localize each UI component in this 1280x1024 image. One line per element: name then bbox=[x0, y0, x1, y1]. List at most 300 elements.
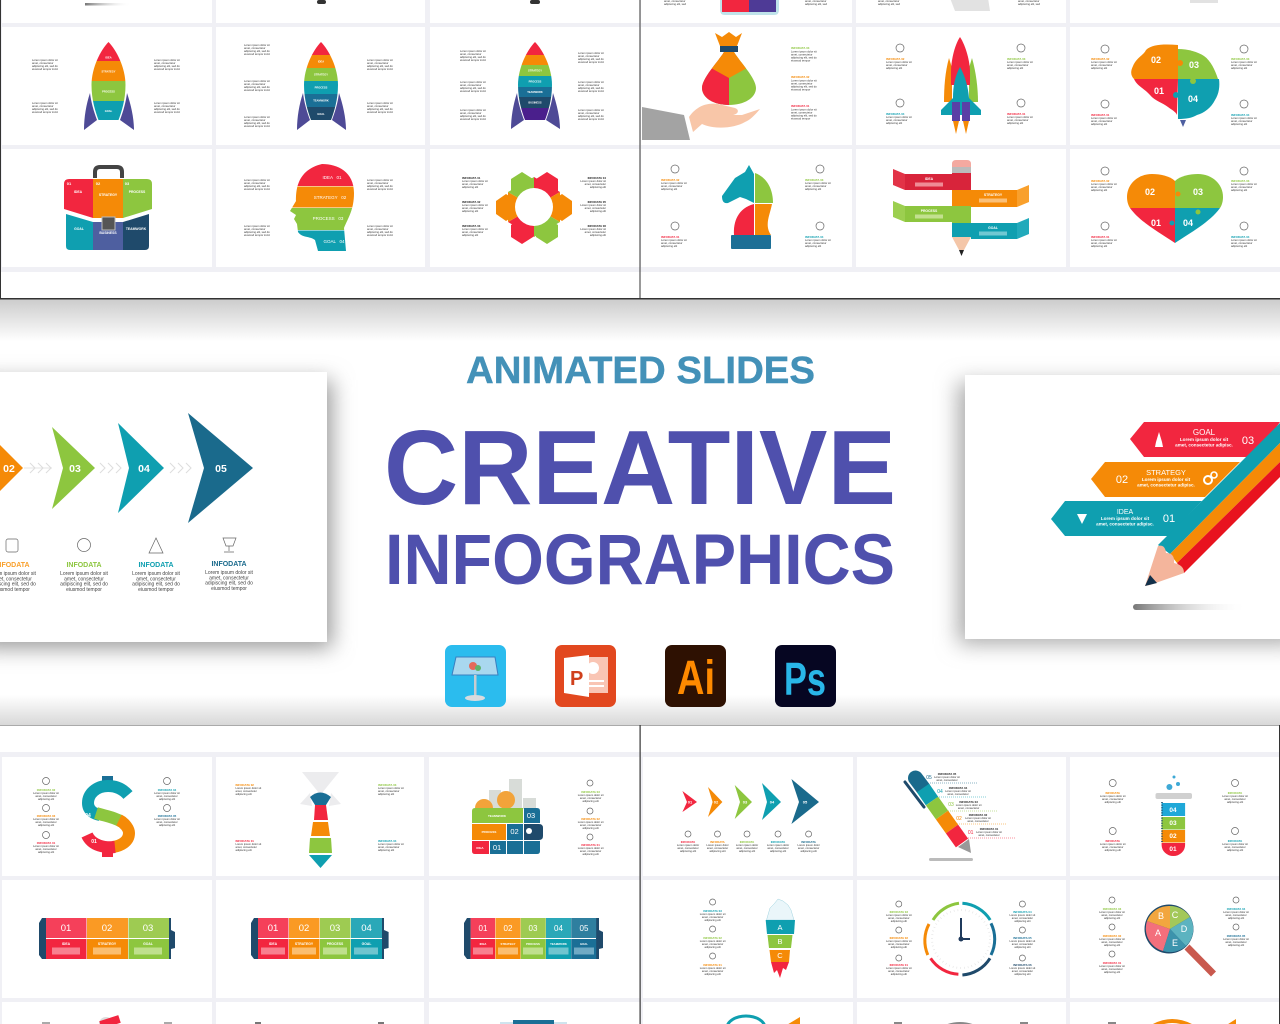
panel: left preview slide with arrows: eiusmod tempor bbox=[66, 587, 102, 593]
slide: chess knight: amet, consectetur bbox=[661, 241, 682, 245]
slide: heart puzzle: amet, consectetur bbox=[1231, 241, 1252, 245]
panel: top-right slide sheet: adipiscing elit, sed bbox=[664, 2, 686, 6]
slide: battery with five cells: 05 bbox=[580, 924, 589, 933]
slide: diagonal pen: amet, consectetur bbox=[947, 792, 969, 796]
slide: test tube: INFODATA bbox=[1105, 839, 1121, 843]
slide: wallet with coins bbox=[472, 779, 604, 856]
slide: rocket with four sections: IDEA bbox=[105, 56, 112, 60]
slide: magnifier pie: adipiscing elit bbox=[1104, 943, 1120, 947]
slide: rocket with seven sections: eiusmod tempor incid. bbox=[578, 60, 605, 64]
slide: necktie: INFODATA 04 bbox=[378, 839, 397, 843]
slide: iceberg: Lorem ipsum dolor sit bbox=[700, 939, 726, 943]
slide: briefcase bbox=[64, 167, 152, 250]
slide: head profile: adipiscing elit, sed do bbox=[244, 230, 270, 234]
slide: five arrows bbox=[677, 779, 820, 853]
slide: iceberg: INFODATA 02 bbox=[703, 936, 722, 940]
slide: money bag on hand: amet, consectetur bbox=[791, 81, 812, 85]
slide: wallet with coins: INFODATA 01 bbox=[581, 843, 600, 847]
slide: test tube: Lorem ipsum dolor sit bbox=[1100, 794, 1126, 798]
slide: five arrows: 02 bbox=[714, 800, 719, 804]
slide: brain puzzle: amet, consectetur bbox=[1091, 63, 1112, 67]
panel: right preview slide with pencil: 02 bbox=[1116, 474, 1128, 486]
slide: clock: INFODATA 05 bbox=[1013, 936, 1032, 940]
slide: battery with five cells: 03 bbox=[529, 924, 538, 933]
slide: battery with four cells: IDEA bbox=[269, 942, 278, 946]
slide: test tube: INFODATA bbox=[1228, 839, 1243, 843]
slide: rocket with six sections: adipiscing elit, sed do bbox=[244, 121, 270, 125]
slide: head profile: adipiscing elit, sed do bbox=[367, 184, 393, 188]
slide: dollar sign bbox=[33, 776, 180, 857]
slide: head profile: eiusmod tempor incid. bbox=[244, 187, 271, 191]
slide: rocket with six sections bbox=[244, 40, 394, 130]
slide: gear ring: Lorem ipsum dolor sit bbox=[462, 179, 488, 183]
slide: battery with five cells: TEAMWORK bbox=[550, 942, 567, 946]
slide: rocket with seven sections: Lorem ipsum dolor sit bbox=[460, 108, 486, 112]
slide: battery with five cells: GOAL bbox=[580, 942, 588, 946]
slide: battery with four cells: 02 bbox=[299, 923, 309, 934]
slide: brain puzzle: adipiscing elit bbox=[1231, 66, 1247, 70]
slide: money bag on hand: Lorem ipsum dolor sit bbox=[791, 49, 817, 53]
slide: necktie: Lorem ipsum dolor sit bbox=[378, 842, 404, 846]
slide: battery with four cells bbox=[251, 918, 389, 959]
panel: left preview slide with arrows: 02 bbox=[3, 463, 15, 475]
slide: heart puzzle: INFODATA 03 bbox=[1231, 179, 1250, 183]
panel: right preview slide with pencil: 03 bbox=[1242, 435, 1254, 447]
slide: big rocket: amet, consectetur bbox=[886, 63, 907, 67]
slide: rocket with four sections: adipiscing elit, sed do bbox=[32, 64, 58, 68]
slide: big rocket: Lorem ipsum dolor sit bbox=[886, 60, 912, 64]
slide: rocket with seven sections: PROCESS bbox=[529, 80, 542, 84]
slide: diagonal pen: INFODATA 01 bbox=[980, 827, 999, 831]
slide: five arrows: Lorem ipsum dolor bbox=[736, 843, 758, 847]
slide: clock: adipiscing elit bbox=[1014, 919, 1031, 923]
slide: test tube: Lorem ipsum dolor sit bbox=[1100, 842, 1126, 846]
slide: five arrows: adipiscing elit bbox=[770, 849, 786, 853]
slide: rocket with four sections: GOAL bbox=[105, 109, 113, 113]
slide: brain puzzle: 02 bbox=[1151, 55, 1161, 65]
slide: iceberg: Lorem ipsum dolor sit bbox=[700, 966, 726, 970]
slide: magnifier pie: INFODATA 05 bbox=[1227, 934, 1246, 938]
slide: rocket with seven sections: adipiscing elit, sed do bbox=[460, 114, 486, 118]
slide: brain puzzle: INFODATA 03 bbox=[1231, 57, 1250, 61]
panel: top-right slide sheet: amet, consectetur bbox=[1018, 0, 1039, 3]
slide: brain puzzle bbox=[1091, 45, 1257, 127]
slide: test tube: adipiscing elit bbox=[1105, 800, 1121, 804]
slide: rocket with seven sections: Lorem ipsum dolor sit bbox=[578, 108, 604, 112]
slide: wallet with coins: adipiscing elit bbox=[583, 826, 599, 830]
panel: left preview slide with arrows: 03 bbox=[69, 463, 81, 475]
panel: bottom-left slide sheet bbox=[0, 725, 640, 1024]
slide: gear ring: adipiscing elit bbox=[462, 209, 478, 213]
slide: five arrows: Lorem ipsum dolor bbox=[767, 843, 789, 847]
panel: left preview slide with arrows: eiusmod tempor bbox=[211, 586, 247, 592]
slide: five arrows: INFODATA bbox=[710, 840, 726, 844]
slide: rocket with seven sections: TEAMWORK bbox=[527, 90, 543, 94]
slide: five arrows: amet, consectetur bbox=[677, 846, 699, 850]
slide: magnifier pie: A bbox=[1155, 928, 1161, 938]
slide: rocket with four sections: eiusmod tempor incid. bbox=[154, 67, 181, 71]
slide: big rocket: amet, consectetur bbox=[1007, 118, 1028, 122]
slide: rocket with six sections: adipiscing elit, sed do bbox=[244, 85, 270, 89]
slide: gear ring: amet, consectetur bbox=[462, 230, 483, 234]
slide: diagonal pen: amet, consectetur bbox=[936, 778, 958, 782]
slide: gear ring: INFODATA 01 bbox=[462, 176, 481, 180]
slide: iceberg: adipiscing elit bbox=[705, 945, 721, 949]
panel: left preview slide with arrows: amet, consectetur bbox=[209, 575, 249, 581]
slide: test tube: amet, consectetur bbox=[1224, 845, 1246, 849]
slide: brain puzzle: amet, consectetur bbox=[1231, 63, 1252, 67]
slide: briefcase: 03 bbox=[125, 181, 130, 186]
slide: battery with three cells: 01 bbox=[61, 923, 71, 934]
slide: clock: adipiscing elit bbox=[891, 945, 907, 949]
slide: dollar sign: Lorem ipsum dolor sit bbox=[33, 791, 59, 795]
slide: battery with five cells: 02 bbox=[504, 924, 513, 933]
slide: rocket with seven sections: eiusmod tempor incid. bbox=[460, 117, 487, 121]
icon: illustrator bbox=[665, 645, 726, 707]
slide: gear ring: amet, consectetur bbox=[585, 206, 606, 210]
slide: test tube: amet, consectetur bbox=[1102, 797, 1123, 801]
slide: wallet with coins: Lorem ipsum dolor sit bbox=[578, 820, 604, 824]
slide: dollar sign: Lorem ipsum dolor sit bbox=[154, 817, 180, 821]
slide: wallet with coins: amet, consectetur bbox=[580, 849, 601, 853]
slide: heart puzzle: adipiscing elit bbox=[1231, 188, 1247, 192]
slide: gear ring: adipiscing elit bbox=[590, 233, 606, 237]
panel: central hero background bbox=[0, 0, 1280, 725]
slide: rocket with six sections: STRATEGY bbox=[314, 72, 328, 76]
slide: iceberg: C bbox=[777, 951, 783, 960]
slide: dollar sign: amet, consectetur bbox=[35, 794, 57, 798]
slide: rocket with four sections: eiusmod tempor incid. bbox=[154, 110, 181, 114]
slide: test tube bbox=[1100, 776, 1248, 856]
slide: dollar sign: Lorem ipsum dolor sit bbox=[33, 817, 59, 821]
slide: rocket with four sections: PROCESS bbox=[102, 90, 115, 94]
slide: diagonal pen: amet, consectetur bbox=[978, 833, 1000, 837]
slide: rocket with six sections: Lorem ipsum dolor sit bbox=[367, 58, 393, 62]
slide: brain puzzle: Lorem ipsum dolor sit bbox=[1231, 60, 1257, 64]
slide: gear ring: Lorem ipsum dolor sit bbox=[462, 203, 488, 207]
slide: dollar sign: amet, consectetur bbox=[35, 847, 57, 851]
icon: powerpoint bbox=[555, 645, 616, 707]
slide: rocket with four sections: amet, consectetur bbox=[154, 61, 175, 65]
slide: rocket with six sections: adipiscing elit, sed do bbox=[367, 107, 393, 111]
slide: diagonal pen: 02 bbox=[956, 816, 962, 822]
slide: briefcase: 02 bbox=[96, 181, 101, 186]
slide: magnifier pie bbox=[1099, 897, 1249, 974]
slide: heart puzzle: Lorem ipsum dolor sit bbox=[1091, 182, 1117, 186]
slide: diagonal pen: INFODATA 05 bbox=[938, 772, 957, 776]
slide: big rocket: INFODATA 03 bbox=[1007, 57, 1026, 61]
slide: iceberg: A bbox=[777, 923, 783, 932]
slide: rocket with six sections: eiusmod tempor incid. bbox=[244, 124, 271, 128]
slide: rocket with four sections: Lorem ipsum dolor sit bbox=[32, 101, 58, 105]
slide: dollar sign: 04 bbox=[85, 813, 91, 819]
slide: dollar sign: Lorem ipsum dolor sit bbox=[154, 791, 180, 795]
slide: money bag on hand bbox=[642, 32, 817, 140]
slide: five arrows: INFODATA bbox=[801, 840, 817, 844]
icon: photoshop bbox=[775, 645, 836, 707]
slide: head profile: amet, consectetur bbox=[244, 181, 265, 185]
slide: five arrows: Lorem ipsum dolor bbox=[797, 843, 820, 847]
slide: dollar sign: adipiscing elit bbox=[38, 823, 54, 827]
slide: rocket with six sections: IDEA bbox=[318, 60, 324, 64]
slide: necktie: INFODATA 03 bbox=[378, 783, 397, 787]
slide: brain puzzle: INFODATA 02 bbox=[1091, 57, 1110, 61]
panel: left preview slide with arrows: adipiscing elit, sed do bbox=[132, 582, 180, 588]
slide: five arrows: INFODATA bbox=[681, 840, 696, 844]
slide: head profile: adipiscing elit, sed do bbox=[244, 184, 270, 188]
slide: clock: adipiscing elit bbox=[891, 972, 907, 976]
slide: briefcase: PROCESS bbox=[129, 190, 146, 194]
slide: magnifier pie: amet, consectetur bbox=[1225, 913, 1247, 917]
slide: wallet with coins: IDEA bbox=[476, 846, 484, 850]
slide: chess knight: amet, consectetur bbox=[805, 241, 826, 245]
slide: brain puzzle: adipiscing elit bbox=[1091, 122, 1107, 126]
slide: test tube: 03 bbox=[1169, 820, 1177, 827]
slide: gear ring bbox=[462, 172, 606, 244]
slide: rocket with six sections: TEAMWORK bbox=[313, 98, 329, 102]
slide: rocket with seven sections: adipiscing elit, sed do bbox=[460, 55, 486, 59]
slide: magnifier pie: Lorem ipsum dolor sit bbox=[1099, 910, 1125, 914]
slide: chess knight: Lorem ipsum dolor sit bbox=[805, 181, 831, 185]
slide: clock: Lorem ipsum dolor sit bbox=[1010, 939, 1035, 943]
slide: big rocket: Lorem ipsum dolor sit bbox=[1007, 115, 1033, 119]
slide: dollar sign: 03 bbox=[107, 834, 113, 840]
slide: iceberg: amet, consectetur bbox=[702, 942, 723, 946]
slide: partial bottom row right bbox=[727, 1016, 1236, 1024]
slide: money bag on hand: eiusmod tempor bbox=[791, 116, 810, 120]
slide: head profile bbox=[244, 160, 394, 252]
slide: big rocket: adipiscing elit bbox=[1007, 121, 1023, 125]
slide: head profile: adipiscing elit, sed do bbox=[367, 230, 393, 234]
slide: rocket with seven sections: amet, consectetur bbox=[460, 83, 481, 87]
slide: dollar sign: 01 bbox=[115, 803, 121, 809]
panel: right preview slide with pencil: Lorem ipsum dolor sit bbox=[1101, 516, 1150, 521]
slide: rocket with six sections: GOAL bbox=[317, 112, 325, 116]
slide: chess knight: INFODATA 03 bbox=[805, 178, 824, 182]
slide: clock: amet, consectetur bbox=[1012, 969, 1033, 973]
slide: magnifier pie: adipiscing elit bbox=[1104, 970, 1120, 974]
slide: money bag on hand: adipiscing elit, sed do bbox=[791, 55, 817, 59]
slide: wallet with coins: TEAMWORK bbox=[488, 814, 507, 818]
slide: heart puzzle: amet, consectetur bbox=[1231, 185, 1252, 189]
slide: gear ring: Lorem ipsum dolor sit bbox=[462, 227, 488, 231]
slide: gear ring: amet, consectetur bbox=[462, 206, 483, 210]
slide: chess knight: INFODATA 01 bbox=[661, 235, 680, 239]
slide: test tube: 04 bbox=[1169, 807, 1177, 814]
slide: rocket with seven sections: Lorem ipsum dolor sit bbox=[460, 49, 486, 53]
slide: money bag on hand: eiusmod tempor bbox=[791, 87, 810, 91]
slide: chess knight: Lorem ipsum dolor sit bbox=[661, 238, 687, 242]
slide: magnifier pie: amet, consectetur bbox=[1101, 940, 1123, 944]
slide: dollar sign: adipiscing elit bbox=[38, 850, 54, 854]
slide: magnifier pie: C bbox=[1172, 910, 1179, 920]
panel: left preview slide with arrows: INFODATA bbox=[66, 562, 102, 569]
slide: heart puzzle: 04 bbox=[1183, 218, 1193, 228]
slide: iceberg: Lorem ipsum dolor sit bbox=[700, 912, 726, 916]
slide: brain puzzle: Lorem ipsum dolor sit bbox=[1231, 116, 1257, 120]
slide: gear ring: adipiscing elit bbox=[590, 185, 606, 189]
slide: iceberg: INFODATA 01 bbox=[703, 963, 722, 967]
slide: rocket with seven sections: amet, consectetur bbox=[460, 111, 481, 115]
slide: rocket with six sections: amet, consectetur bbox=[244, 82, 265, 86]
slide: diagonal pen: 05 bbox=[926, 775, 932, 781]
slide: dollar sign: adipiscing elit bbox=[159, 823, 175, 827]
slide: rocket with four sections: amet, consectetur bbox=[32, 61, 53, 65]
slide: rocket with seven sections: Lorem ipsum dolor sit bbox=[578, 51, 604, 55]
slide: wallet with coins: Lorem ipsum dolor sit bbox=[578, 846, 604, 850]
slide: pencil with ribbons: PROCESS bbox=[921, 209, 938, 213]
slide: diagonal pen: amet, consectetur bbox=[967, 819, 989, 823]
slide: test tube: amet, consectetur bbox=[1102, 845, 1123, 849]
slide: rocket with four sections: Lorem ipsum dolor sit bbox=[154, 58, 180, 62]
slide: head profile: eiusmod tempor incid. bbox=[367, 187, 394, 191]
slide: battery with three cells: IDEA bbox=[62, 942, 71, 946]
slide: money bag on hand: adipiscing elit, sed do bbox=[791, 84, 817, 88]
panel: right preview slide with pencil: amet, consectetur adipisc. bbox=[1096, 521, 1154, 526]
slide: gear ring: Lorem ipsum dolor sit bbox=[580, 203, 606, 207]
slide: heart puzzle: INFODATA 02 bbox=[1091, 179, 1110, 183]
icon: powerpoint: P bbox=[570, 668, 583, 690]
slide: briefcase: STRATEGY bbox=[99, 193, 118, 197]
slide: partial bottom row left bbox=[42, 1015, 567, 1024]
slide: clock: Lorem ipsum dolor sit bbox=[1010, 966, 1035, 970]
slide: pencil with ribbons: IDEA bbox=[925, 177, 934, 181]
slide: big rocket: INFODATA 04 bbox=[886, 112, 905, 116]
slide: diagonal pen: 04 bbox=[937, 789, 943, 795]
slide: dollar sign: amet, consectetur bbox=[156, 794, 178, 798]
slide: dollar sign: INFODATA 01 bbox=[37, 841, 56, 845]
slide: necktie: Lorem ipsum dolor sit bbox=[236, 842, 261, 846]
slide: heart puzzle: adipiscing elit bbox=[1091, 188, 1107, 192]
slide: rocket with seven sections: eiusmod tempor incid. bbox=[578, 89, 605, 93]
slide: test tube: Lorem ipsum dolor sit bbox=[1222, 794, 1248, 798]
slide: magnifier pie: Lorem ipsum dolor sit bbox=[1099, 937, 1125, 941]
panel: right preview slide with pencil: GOAL bbox=[1193, 428, 1216, 437]
slide: rocket with six sections: Lorem ipsum dolor sit bbox=[244, 115, 270, 119]
slide: necktie: adipiscing elit bbox=[378, 792, 394, 796]
slide: head profile: amet, consectetur bbox=[244, 227, 265, 231]
slide: rocket with seven sections: Lorem ipsum dolor sit bbox=[578, 80, 604, 84]
panel: left preview slide with arrows: eiusmod tempor bbox=[138, 587, 174, 593]
slide: wallet with coins: INFODATA 02 bbox=[581, 817, 600, 821]
slide: wallet with coins: amet, consectetur bbox=[580, 796, 601, 800]
slide: brain puzzle: 04 bbox=[1188, 94, 1198, 104]
slide: magnifier pie: B bbox=[1158, 911, 1164, 921]
slide: heart puzzle: amet, consectetur bbox=[1091, 241, 1112, 245]
slide: iceberg: B bbox=[777, 937, 783, 946]
slide: chess knight bbox=[661, 165, 831, 249]
panel: top-left slide sheet bbox=[0, 0, 640, 298]
slide: magnifier pie: INFODATA 04 bbox=[1227, 907, 1246, 911]
slide: battery with four cells: PROCESS bbox=[327, 942, 344, 946]
slide: chess knight: adipiscing elit bbox=[805, 187, 821, 191]
panel: left preview slide with arrows: amet, consectetur bbox=[136, 576, 176, 582]
slide: brain puzzle: adipiscing elit bbox=[1091, 66, 1107, 70]
slide: brain puzzle: INFODATA 04 bbox=[1231, 113, 1250, 117]
slide: necktie: amet, consectetur bbox=[236, 789, 257, 793]
slide: head profile: STRATEGY 02 bbox=[314, 195, 347, 200]
slide: rocket with seven sections: eiusmod tempor incid. bbox=[460, 58, 487, 62]
slide: rocket with four sections: STRATEGY bbox=[102, 70, 116, 74]
slide: clock: amet, consectetur bbox=[1012, 916, 1033, 920]
slide: battery with five cells: PROCESS bbox=[526, 942, 540, 946]
panel: right preview slide with pencil: amet, consectetur adipisc. bbox=[1137, 482, 1195, 487]
slide: rocket with six sections: eiusmod tempor incid. bbox=[367, 67, 394, 71]
slide: chess knight: INFODATA 02 bbox=[661, 178, 680, 182]
panel: top-right slide sheet: adipiscing elit, sed bbox=[878, 2, 900, 6]
slide: wallet with coins: Lorem ipsum dolor sit bbox=[578, 793, 604, 797]
slide: magnifier pie: Lorem ipsum dolor sit bbox=[1223, 937, 1249, 941]
slide: clock: Lorem ipsum dolor sit bbox=[1010, 913, 1035, 917]
slide: chess knight: Lorem ipsum dolor sit bbox=[661, 181, 687, 185]
slide: brain puzzle: 01 bbox=[1154, 86, 1164, 96]
slide: five arrows: adipiscing elit bbox=[739, 849, 755, 853]
slide: chess knight: amet, consectetur bbox=[661, 184, 682, 188]
slide: rocket with seven sections: adipiscing elit, sed do bbox=[578, 114, 604, 118]
slide: pencil with ribbons: STRATEGY bbox=[984, 193, 1003, 197]
slide: battery with five cells: 01 bbox=[479, 924, 488, 933]
slide: test tube: adipiscing elit bbox=[1227, 800, 1243, 804]
panel: right preview slide with pencil bbox=[965, 375, 1280, 639]
slide: necktie: Lorem ipsum dolor sit bbox=[236, 786, 261, 790]
slide: money bag on hand: adipiscing elit, sed do bbox=[791, 113, 817, 117]
slide: heart puzzle: amet, consectetur bbox=[1091, 185, 1112, 189]
panel: top-right slide sheet: amet, consectetur bbox=[805, 0, 826, 3]
slide: rocket with four sections: adipiscing elit, sed do bbox=[154, 64, 180, 68]
slide: battery with five cells: 04 bbox=[554, 924, 563, 933]
panel: top-right slide sheet: adipiscing elit, sed bbox=[1018, 2, 1040, 6]
slide: five arrows: adipiscing elit bbox=[680, 849, 696, 853]
panel: right preview slide with pencil: 01 bbox=[1163, 513, 1175, 525]
panel: right preview slide with pencil: Lorem ipsum dolor sit bbox=[1180, 437, 1229, 442]
panel: top-right slide sheet: amet, consectetur bbox=[664, 0, 685, 3]
slide: money bag on hand: INFODATA 02 bbox=[791, 75, 810, 79]
slide: dollar sign: Lorem ipsum dolor sit bbox=[33, 844, 59, 848]
slide: money bag on hand: Lorem ipsum dolor sit bbox=[791, 78, 817, 82]
slide: heart puzzle bbox=[1091, 167, 1257, 248]
slide: necktie: adipiscing elit bbox=[236, 792, 252, 796]
slide: five arrows: 03 bbox=[743, 800, 748, 804]
slide: brain puzzle: amet, consectetur bbox=[1091, 119, 1112, 123]
panel: bottom-right slide sheet bbox=[640, 725, 1280, 1024]
slide: clock: Lorem ipsum dolor sit bbox=[886, 913, 912, 917]
slide: dollar sign: amet, consectetur bbox=[156, 820, 178, 824]
slide: gear ring: amet, consectetur bbox=[462, 182, 483, 186]
slide: five arrows: INFODATA bbox=[771, 840, 786, 844]
slide: rocket with seven sections: eiusmod tempor incid. bbox=[578, 117, 605, 121]
slide: head profile: Lorem ipsum dolor sit bbox=[367, 224, 393, 228]
slide: magnifier pie: adipiscing elit bbox=[1228, 943, 1244, 947]
slide: heart puzzle: Lorem ipsum dolor sit bbox=[1231, 238, 1257, 242]
slide: five arrows: 01 bbox=[688, 800, 693, 804]
heading: animated slides: ANIMATED SLIDES bbox=[466, 350, 815, 392]
slide: wallet with coins: 03 bbox=[527, 811, 535, 820]
panel: left preview slide with arrows: Lorem ipsum dolor sit bbox=[60, 571, 109, 577]
slide: diagonal pen: Lorem ipsum dolor sit bbox=[934, 775, 960, 779]
slide: rocket with six sections: Lorem ipsum dolor sit bbox=[244, 43, 270, 47]
slide: heart puzzle: 02 bbox=[1145, 187, 1155, 197]
slide: clock: amet, consectetur bbox=[1012, 942, 1033, 946]
slide: rocket with seven sections: amet, consectetur bbox=[578, 83, 599, 87]
slide: clock: amet, consectetur bbox=[888, 916, 910, 920]
slide: necktie: adipiscing elit bbox=[236, 848, 252, 852]
slide: five arrows: amet, consectetur bbox=[767, 846, 789, 850]
slide: five arrows: 04 bbox=[770, 800, 775, 804]
slide: brain puzzle: 03 bbox=[1189, 60, 1199, 70]
slide: chess knight: INFODATA 04 bbox=[805, 235, 824, 239]
slide: rocket with six sections: adipiscing elit, sed do bbox=[367, 64, 393, 68]
slide: rocket with six sections: amet, consectetur bbox=[244, 46, 265, 50]
